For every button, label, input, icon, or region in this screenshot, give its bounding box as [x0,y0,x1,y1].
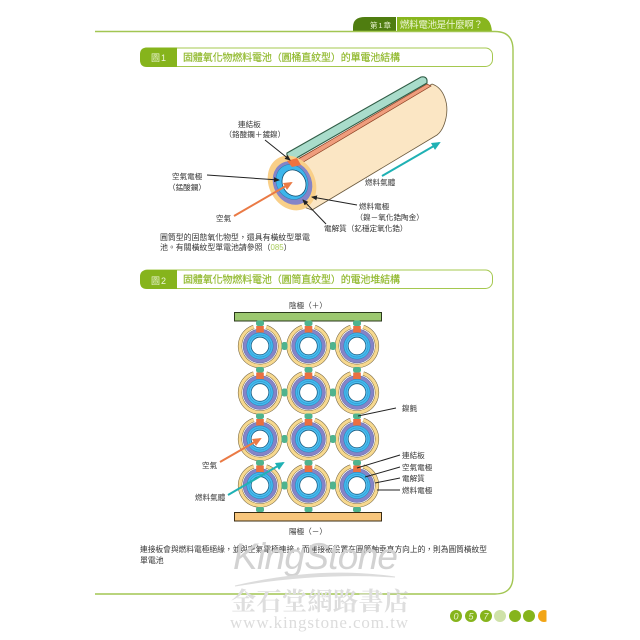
note: figure 2: 連接板會與燃料電極絕緣，並與空氣電極連接。而連接板設置在圓筒軸垂直方向上的，則為圓筒橫紋型 [140,544,487,554]
cathode label: 陰極（＋） [289,300,327,310]
labels: figure 1: 空氣 [216,213,232,223]
air arrow [234,183,291,216]
note: figure 1: 池。有關橫紋型單電池請參照（085） [160,242,292,252]
watermark: www.kingstone.com.tw [230,613,409,632]
chapter tab: 第1章 [370,20,392,30]
labels: stack: 空氣電極 [402,462,433,472]
air arrow: stack [220,439,260,462]
heading: figure 1: 圖1 [151,53,166,63]
labels: stack: 燃料電極 [402,485,433,495]
labels: stack: 連結板 [402,450,425,460]
page number dots: 0 [453,612,459,622]
page number dots: 5 [468,612,474,622]
labels: stack: 鎳氈 [402,403,418,413]
labels: figure 1: （鉻酸鑭＋鍍鎳） [224,129,285,139]
heading: figure 2: 固體氧化物燃料電池（圓筒直紋型）的電池堆結構 [183,273,400,286]
page number dots [450,608,556,624]
labels: stack: 電解質 [402,473,425,483]
fuel gas arrow: stack [228,463,283,495]
note: figure 1 [160,232,310,252]
leaders: figure 1 [207,140,357,224]
note: figure 1: 圓筒型的固態氧化物型，還具有橫紋型單電 [160,232,310,242]
chapter tab: 燃料電池是什麼啊？ [400,19,483,31]
cathode plate [234,312,382,321]
labels: figure 1: 燃料氣體 [365,177,396,187]
anode plate [234,512,382,521]
note: figure 2 [140,544,487,565]
labels: figure 1: 電解質（釔穩定氧化鋯） [324,223,408,233]
labels: stack [195,403,433,502]
chapter tab [353,17,492,32]
salmon interconnect strip [295,84,431,164]
note: figure 2: 單電池 [140,555,164,565]
heading: figure 1: 固體氧化物燃料電池（圓桶直紋型）的單電池結構 [183,51,400,64]
fuel gas arrow [382,143,439,176]
watermark [230,536,409,632]
cell stack [240,320,377,512]
watermark: KingStone [233,536,398,577]
diagram: single cell cylinder [258,77,447,219]
page number dots: 7 [483,612,489,622]
watermark: 金石堂網路書店 [231,588,409,616]
leaders: stack [357,408,400,490]
anode label: 陽極（－） [289,526,327,536]
cylinder body [280,84,447,210]
heading: figure 2: 圖2 [151,276,166,286]
labels: figure 1 [168,119,424,233]
labels: figure 1: 連結板 [238,119,261,129]
labels: stack: 空氣 [202,460,218,470]
labels: stack: 燃料氣體 [195,492,226,502]
heading: figure 1 [140,48,492,67]
labels: figure 1: （錳酸鑭） [168,182,206,192]
cylinder end section [258,147,326,219]
content frame [95,32,513,594]
labels: figure 1: 空氣電極 [172,171,203,181]
labels: figure 1: （鎳－氧化鋯陶金） [356,212,424,222]
green contact strip [287,77,427,160]
labels: figure 1: 燃料電極 [359,201,390,211]
heading: figure 2 [140,270,492,289]
